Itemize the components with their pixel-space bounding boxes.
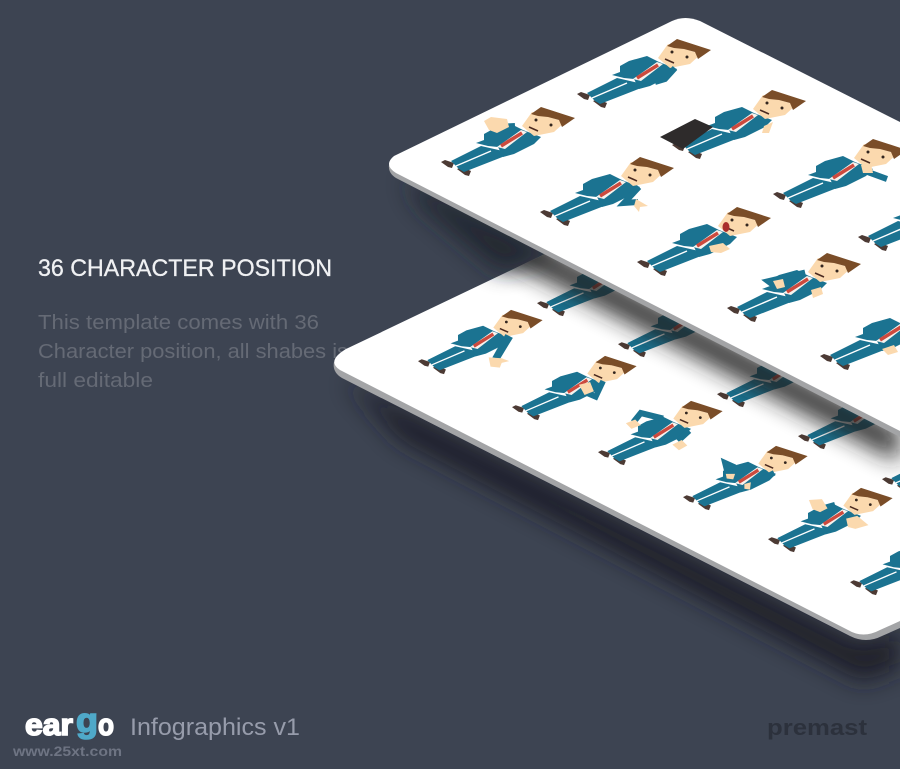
watermark: www.25xt.com: [12, 743, 122, 759]
description text: Character position, all shabes is: [38, 341, 348, 363]
character 8: [618, 293, 743, 357]
character 2: [512, 356, 637, 420]
character 10: [798, 385, 900, 449]
lower card surface: [334, 254, 900, 634]
character 7: [537, 252, 662, 316]
description text: This template comes with 36: [38, 312, 319, 334]
character 6: [637, 207, 771, 276]
description text: [38, 312, 348, 392]
character 5: [773, 139, 900, 208]
panel: upper card: [389, 18, 900, 462]
character 1: [441, 107, 575, 176]
logo: eargo: g: [76, 702, 98, 740]
character 1: [418, 310, 543, 374]
character 4: [540, 157, 674, 226]
heading: 36 CHARACTER POSITION: [38, 255, 332, 282]
description text: full editable: [38, 370, 153, 392]
logo: eargo: o: [98, 707, 114, 742]
logo: premast: premast: [767, 715, 868, 740]
upper card shadow on lower card: [498, 254, 900, 476]
characters: upper card: [441, 39, 900, 370]
briefcase: [660, 119, 713, 149]
upper card edge: [389, 100, 900, 437]
character 11: [882, 428, 900, 492]
logo: eargo: [25, 702, 114, 742]
character 4: [683, 446, 808, 510]
panel: lower card: [334, 252, 900, 682]
upper card shadow on background: [405, 178, 560, 272]
lower card edge: [334, 260, 900, 640]
logo: eargo: ear: [25, 707, 73, 742]
character 9: [717, 343, 842, 407]
character 9: [820, 301, 900, 370]
lower card shadow: [345, 380, 900, 682]
character 6: [850, 531, 900, 595]
character 5: [768, 488, 893, 552]
character 3: [672, 90, 806, 159]
character 7: [858, 182, 900, 251]
upper card surface: [389, 18, 900, 431]
character 3: [598, 401, 723, 465]
characters: lower card: [418, 252, 900, 595]
character 2: [577, 39, 711, 108]
footer title: Infographics v1: [130, 714, 300, 741]
character 8: [727, 253, 861, 322]
